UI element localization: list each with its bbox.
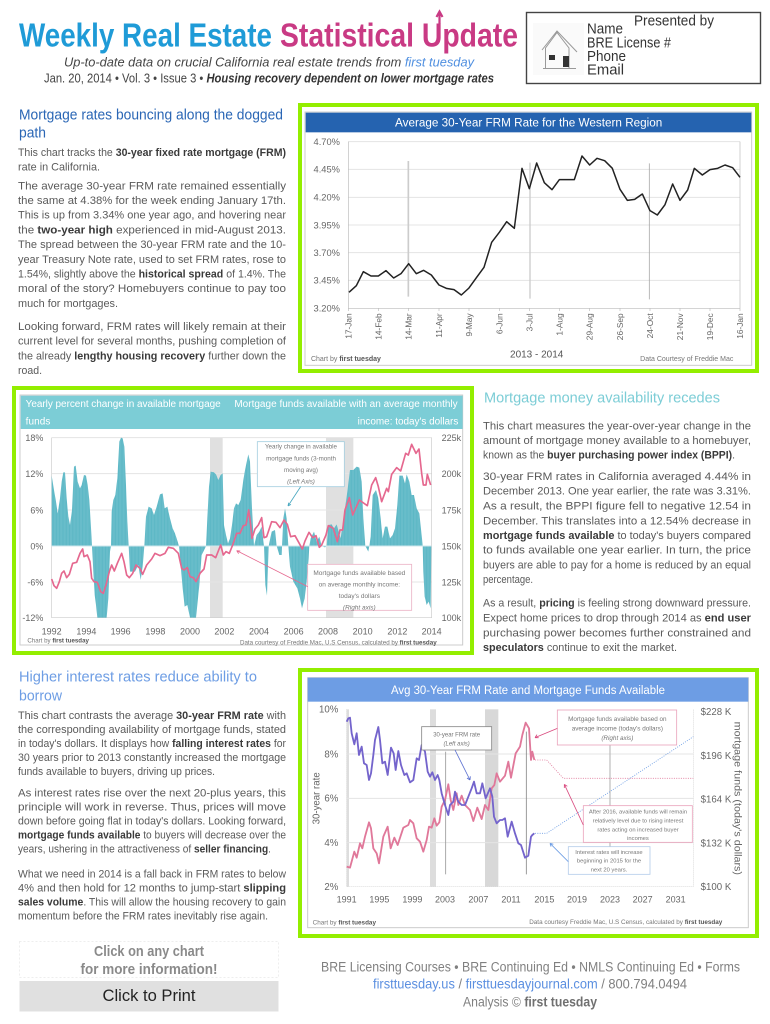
left axis labels: 2% (324, 882, 339, 893)
callout: interest rates: Interest rates will increase (575, 850, 643, 856)
callout: mortgage funds (535, 710, 677, 745)
presented by box: Email (587, 62, 624, 78)
chart header: Average 30-Year FRM Rate for the Western Region (395, 116, 662, 130)
y axis labels (314, 137, 340, 314)
footer links: BRE Licensing Courses • BRE Continuing Ed • NMLS Continuing Ed • Forms (321, 960, 740, 975)
text block: mortgage rates body (18, 147, 287, 377)
x axis labels: 1-Aug (555, 313, 565, 336)
text block: higher interest rates body: the corresponding availability of mortgage funds, stated (18, 724, 286, 736)
callout: interest rates: next 20 years. (591, 867, 628, 873)
x axis labels: 1994 (76, 626, 96, 636)
right axis labels: 150k (442, 541, 462, 551)
left axis labels (319, 705, 339, 893)
chart header (21, 396, 463, 429)
x axis labels: 2031 (666, 895, 686, 905)
callout: after 2016: After 2016, available funds will remain (589, 810, 687, 816)
text block: mortgage rates body: 1.54%, slightly above the historical spread of 1.4%. The (18, 268, 286, 280)
callout: mortgage funds: on average monthly income: (319, 581, 400, 588)
text block: mortgage money body: As a result, the BPPI figure fell to negative 12.54 in (483, 501, 751, 513)
text block: higher interest rates body: momentum before the FRM rates inevitably rise again. (18, 911, 268, 923)
chart header: Avg 30-Year FRM Rate and Mortgage Funds Available (391, 683, 665, 697)
left axis labels: 8% (324, 749, 339, 760)
callout: 30-year rate: 30-year FRM rate (433, 732, 481, 738)
y axis labels: 4.45% (314, 165, 340, 175)
text block: higher interest rates body: This chart contrasts the average 30-year FRM rate with (18, 710, 286, 722)
title: Weekly Real Estate (19, 18, 272, 55)
left axis title: 30-year rate (311, 772, 322, 824)
text block: higher interest rates body: funds available to buyers, driving up prices. (18, 766, 215, 778)
text block: mortgage money body: amount of mortgage money available to a homebuyer, (483, 435, 751, 447)
right axis labels: $164 K (701, 794, 732, 805)
x axis labels: 19-Dec (705, 313, 715, 340)
text block: mortgage rates body: road. (18, 365, 42, 377)
y axis labels: 3.95% (314, 220, 340, 230)
text block: higher interest rates body: As interest rates rise over the next 20-plus years, this (18, 788, 287, 800)
x axis labels: 2000 (180, 626, 200, 636)
text block: mortgage rates body: the two-year high experienced in mid-August 2013. (18, 224, 286, 236)
x axis labels: 26-Sep (615, 313, 625, 340)
callout: click on any chart: Click on any chart (94, 943, 204, 960)
panel: higher interest rates text (18, 670, 287, 923)
text block: mortgage rates body: current level for several months, pushing completion of (18, 336, 287, 348)
right axis labels: 125k (442, 577, 462, 587)
callout: after 2016: incomes (627, 836, 649, 842)
x axis labels: 2012 (387, 626, 407, 636)
callout: after 2016: rates acting on increased buyer (597, 827, 679, 833)
panel: mortgage money text (483, 391, 752, 654)
x axis labels (337, 895, 686, 905)
text block: mortgage rates body: year Treasury Note rate, used to set FRM rates, rose to (18, 254, 286, 266)
callout: mortgage funds: today's dollars (339, 593, 381, 600)
x axis labels: 17-Jan (343, 313, 353, 339)
callout: interest rates: beginning in 2015 for the (577, 859, 641, 865)
x axis labels: 2011 (501, 895, 521, 905)
y axis labels: 4.70% (314, 137, 340, 147)
right axis labels (701, 707, 732, 893)
text block: mortgage money body: mortgage funds available to today's buyers compared (483, 530, 751, 542)
x axis labels: 29-Aug (585, 313, 595, 340)
text block: higher interest rates body: down before going flat in today's dollars. Looking forward, (18, 816, 286, 828)
callout: mortgage funds: (Right axis) (343, 604, 376, 611)
right axis labels: $228 K (701, 707, 732, 718)
text block: mortgage money body: 30-year FRM rates in California averaged 4.44% in (483, 471, 751, 483)
x axis labels: 2008 (318, 626, 338, 636)
issue line: Jan. 20, 2014 • Vol. 3 • Issue 3 • Housing recovery dependent on lower mortgage rates (44, 71, 494, 85)
x axis labels: 2019 (567, 895, 587, 905)
text block: mortgage rates body: the already lengthy housing recovery further down the (18, 350, 286, 362)
text block: mortgage rates body: moral of the story? Homebuyers continue to pay too (18, 283, 286, 295)
presented by box: Presented by (634, 14, 715, 30)
text block: mortgage rates body: The spread between the 30-year FRM rate and the 10- (18, 239, 286, 251)
text block: mortgage money body: known as the buyer purchasing power index (BPPI). (483, 450, 735, 462)
x axis title: 2013 - 2014 (510, 349, 564, 360)
text block: mortgage money body: percentage. (483, 574, 533, 586)
text block: mortgage rates body: This chart tracks the 30-year fixed rate mortgage (FRM) (18, 147, 286, 159)
text block: mortgage money body (483, 420, 752, 654)
callout: click on any chart: for more information! (80, 961, 218, 978)
presented by box: BRE License # (587, 36, 671, 52)
right axis labels: 100k (442, 613, 462, 623)
left axis labels: -6% (27, 577, 43, 587)
callout: after 2016 (564, 784, 692, 842)
left axis labels (22, 433, 43, 623)
text block: higher interest rates body: sales volume. This will allow the housing recovery to gain (18, 897, 286, 909)
text block: higher interest rates body: principle will work in reverse. Thus, prices will move (18, 802, 286, 814)
callout: yearly change (257, 442, 344, 506)
left axis labels: 6% (324, 794, 339, 805)
data credit: Data Courtesy of Freddie Mac (640, 356, 734, 363)
panel: mortgage rates text (18, 108, 287, 377)
text block: mortgage money body: Expect home prices to drop through 2014 as end user (483, 613, 752, 625)
heading: mortgage rates: path (19, 125, 46, 141)
x axis labels: 2023 (600, 895, 620, 905)
text block: mortgage money body: speculators continue to exit the market. (483, 642, 677, 654)
callout: interest rates (550, 843, 650, 874)
chart credit: Chart by first tuesday (313, 920, 376, 927)
heading: higher interest rates: borrow (19, 689, 63, 705)
text block: mortgage rates body: much for mortgages. (18, 298, 118, 310)
x axis labels: 24-Oct (645, 313, 655, 338)
x axis labels: 16-Jan (735, 313, 745, 339)
x axis labels: 1991 (337, 895, 357, 905)
x axis labels: 2014 (422, 626, 442, 636)
forecast: mortgage funds (535, 760, 693, 778)
right axis labels (442, 433, 462, 623)
callout: yearly change: (Left Axis) (287, 478, 315, 485)
left axis labels: 18% (25, 433, 43, 443)
x axis labels: 2002 (214, 626, 234, 636)
x axis labels: 2015 (534, 895, 554, 905)
callout: mortgage funds: Mortgage funds available based on (568, 716, 667, 723)
line: mortgage funds available (52, 444, 431, 593)
icon: house (542, 31, 577, 68)
text block: mortgage money body: December. This translates into a 12.54% decrease in (483, 515, 751, 527)
x axis labels: 11-Apr (434, 313, 444, 338)
x axis labels: 1999 (402, 895, 422, 905)
title: Statistical Update (280, 18, 518, 55)
text block: mortgage rates body: This is up from 3.34% one year ago, and hovering near (18, 210, 286, 222)
left axis labels: -12% (22, 613, 43, 623)
panel: chart 2 mortgage funds (14, 388, 472, 653)
title (19, 12, 518, 55)
right axis labels: $196 K (701, 751, 732, 762)
x axis labels (42, 626, 442, 636)
footer links: firsttuesday.us / firsttuesdayjournal.com / 800.794.0494 (373, 976, 687, 991)
text block: higher interest rates body: years, ushering in the attractiveness of seller financing. (18, 844, 271, 856)
x axis labels: 1995 (369, 895, 389, 905)
right axis labels: 200k (442, 469, 462, 479)
chart header (308, 678, 748, 702)
chart credit: Chart by first tuesday (27, 638, 90, 645)
presented by box: Name (587, 22, 623, 38)
heading: higher interest rates (19, 670, 257, 705)
line: 30-year rate (347, 718, 534, 858)
left axis labels: 10% (319, 705, 339, 716)
callout: mortgage funds (237, 551, 412, 611)
callout: 30-year rate (422, 727, 492, 780)
x axis labels: 2006 (284, 626, 304, 636)
bars: yearly percent change (52, 438, 431, 618)
data credit: Data courtesy of Freddie Mac, U.S Census, calculated by first tuesday (240, 639, 437, 646)
callout: click on any chart (20, 942, 278, 978)
text block: mortgage money body: This chart measures the year-over-year change in the (483, 420, 751, 432)
x axis labels: 1996 (111, 626, 131, 636)
text block: mortgage money body: to funds available one year earlier. In turn, the price (483, 545, 751, 557)
right axis labels: 225k (442, 433, 462, 443)
chart credit: Chart by first tuesday (311, 356, 381, 363)
callout: mortgage funds: average income (today's dollars) (572, 726, 663, 733)
y axis labels: 3.70% (314, 248, 340, 258)
right axis labels: $100 K (701, 882, 732, 893)
x axis labels: 2004 (249, 626, 269, 636)
panel: chart 1 average FRM rate (300, 105, 757, 371)
x axis labels: 6-Jun (494, 313, 504, 334)
y axis labels: 3.45% (314, 276, 340, 286)
x axis labels: 1998 (145, 626, 165, 636)
line chart: FRM rate (348, 142, 740, 311)
text block: higher interest rates body: 4% and then hold for 12 months to jump-start slipping (18, 883, 286, 895)
x axis labels: 9-May (464, 312, 474, 336)
heading: mortgage rates (19, 108, 283, 141)
footer links: Analysis © first tuesday (463, 995, 597, 1010)
presented by box (526, 12, 760, 84)
callout: yearly change: moving avg) (284, 467, 318, 474)
footer links (321, 960, 740, 1010)
x axis labels: 3-Jul (524, 313, 534, 331)
chart header (306, 113, 751, 132)
heading: mortgage money: Mortgage money availability recedes (484, 391, 720, 407)
callout: after 2016: relatively level due to rising interest (593, 819, 684, 825)
callout: yearly change: mortgage funds (3-month (266, 455, 336, 462)
button: click to print: Click to Print (102, 986, 196, 1005)
text block: mortgage money body: purchasing power becomes further constrained and (483, 627, 751, 639)
text block: higher interest rates body: in today's dollars. It displays how falling interest rates for (18, 738, 286, 750)
x axis labels: 2003 (435, 895, 455, 905)
right axis labels: $132 K (701, 838, 732, 849)
text block: higher interest rates body: What we need in 2014 is a fall back in FRM rates to below (18, 869, 286, 881)
forecast: rate (535, 737, 693, 833)
chart header: funds (26, 416, 50, 427)
heading: mortgage rates: Mortgage rates bouncing along the dogged (19, 108, 283, 124)
data credit: Data courtesy Freddie Mac, U.S Census, calculated by first tuesday (529, 919, 723, 926)
chart header: income: today's dollars (358, 416, 458, 427)
x axis labels: 21-Nov (675, 313, 685, 340)
line: mortgage funds (347, 723, 534, 868)
left axis labels: 12% (25, 469, 43, 479)
y axis labels: 4.20% (314, 193, 340, 203)
x axis labels: 14-Mar (404, 313, 414, 340)
text block: mortgage money body: buyers are able to pay for a home is reduced by an equal (483, 559, 751, 571)
text block: mortgage rates body: The average 30-year FRM rate remained essentially (18, 180, 287, 192)
x axis labels: 14-Feb (373, 313, 383, 340)
text block: mortgage money body: December 2013. One year earlier, the rate was 3.31%. (483, 486, 751, 498)
left axis labels: 4% (324, 838, 339, 849)
left axis labels: 0% (30, 541, 43, 551)
text block: higher interest rates body (18, 710, 287, 923)
chart header: Yearly percent change in available mortgage (26, 399, 221, 410)
x axis labels: 1992 (42, 626, 62, 636)
right axis labels: 175k (442, 505, 462, 515)
x axis labels (343, 312, 745, 340)
left axis labels: 6% (30, 505, 43, 515)
x axis labels: 2010 (353, 626, 373, 636)
chart: bars and line (52, 438, 432, 618)
panel: chart 3 rate and funds (300, 670, 757, 936)
text block: mortgage rates body: Looking forward, FRM rates will likely remain at their (18, 321, 286, 333)
callout: mortgage funds: Mortgage funds available based (313, 570, 406, 577)
text block: mortgage rates body: the same at 4.38% for the week ending January 17th. (18, 195, 286, 207)
right axis title: mortgage funds (today's dollars) (731, 722, 742, 875)
text block: mortgage rates body: rate in California. (18, 162, 100, 174)
x axis labels: 2027 (633, 895, 653, 905)
y axis labels: 3.20% (314, 304, 340, 314)
text block: higher interest rates body: mortgage funds available to buyers will decrease over the (18, 830, 286, 842)
callout: mortgage funds: (Right axis) (601, 735, 633, 742)
text block: higher interest rates body: 30 years prior to 2013 constantly increased the mortgage (18, 752, 286, 764)
presented by box: Phone (587, 49, 626, 65)
heading: higher interest rates: Higher interest rates reduce ability to (19, 670, 257, 686)
subtitle tagline: Up-to-date data on crucial California real estate trends from first tuesday (64, 55, 475, 70)
chart header: Mortgage funds available with an average monthly (234, 399, 458, 410)
button: click to print (20, 981, 278, 1012)
callout: yearly change: Yearly change in available (265, 444, 338, 451)
text block: mortgage money body: As a result, pricing is feeling strong downward pressure. (483, 598, 751, 610)
callout: 30-year rate: (Left axis) (444, 742, 470, 748)
x axis labels: 2007 (468, 895, 488, 905)
chart: rate and funds lines (347, 709, 693, 887)
